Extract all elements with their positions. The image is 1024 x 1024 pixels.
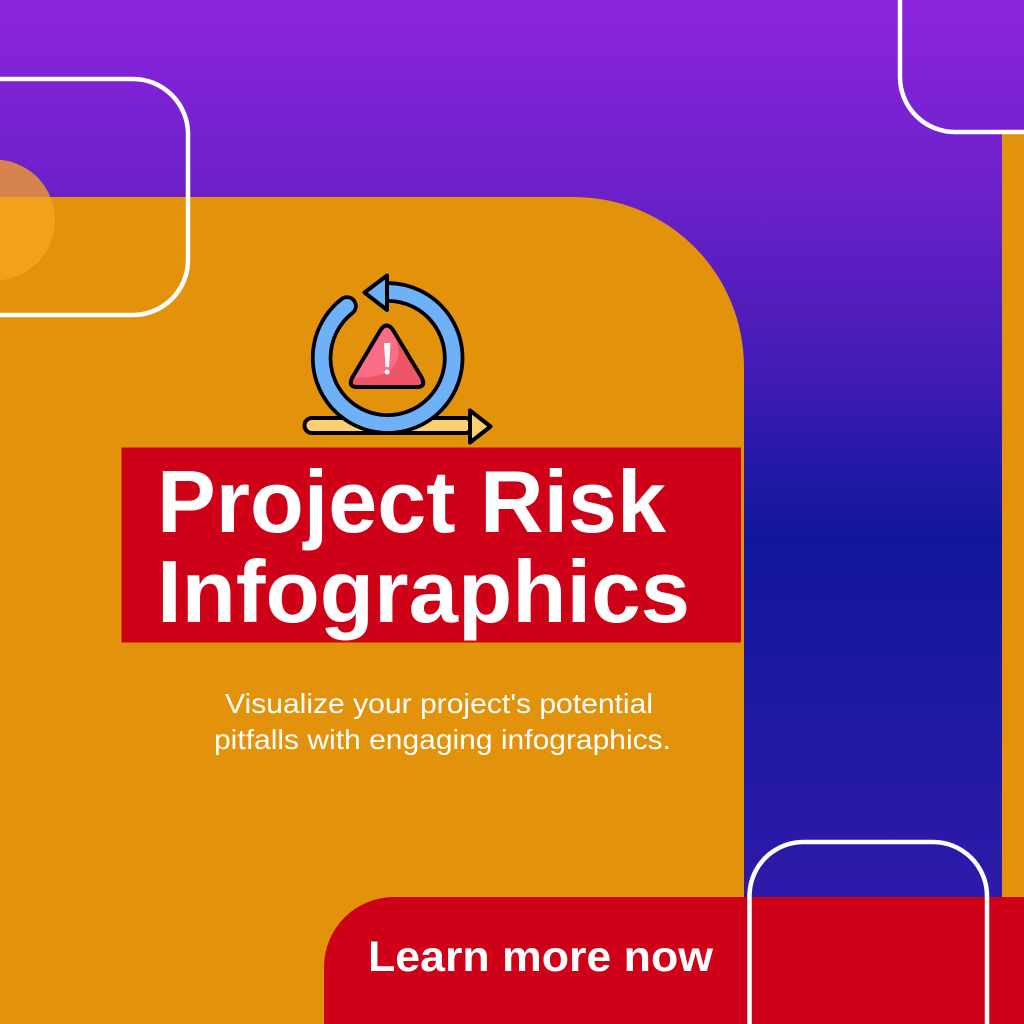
title line 2: Infographics [157, 542, 690, 641]
outline: bottom rounded frame [750, 842, 987, 1024]
icon: project risk cycle [304, 276, 490, 442]
icon: timeline arrow [304, 410, 490, 442]
subtitle: Visualize your project's potential [225, 688, 653, 719]
call-to-action label: Learn more now [368, 933, 714, 981]
panel: orange main panel [0, 197, 744, 1024]
outline: top-left rounded frame [0, 79, 188, 315]
icon: circular arrow [322, 276, 454, 424]
panel: orange right strip [1002, 132, 1024, 1024]
title line 1: Project Risk [157, 452, 667, 551]
outline: top-right rounded frame [900, 0, 1024, 132]
subtitle [214, 688, 671, 755]
decorative translucent circle [0, 160, 55, 280]
panel: red call-to-action bar [324, 897, 1024, 1024]
title banner [122, 448, 741, 642]
subtitle: pitfalls with engaging infographics. [214, 724, 671, 755]
icon: warning triangle [345, 322, 423, 387]
